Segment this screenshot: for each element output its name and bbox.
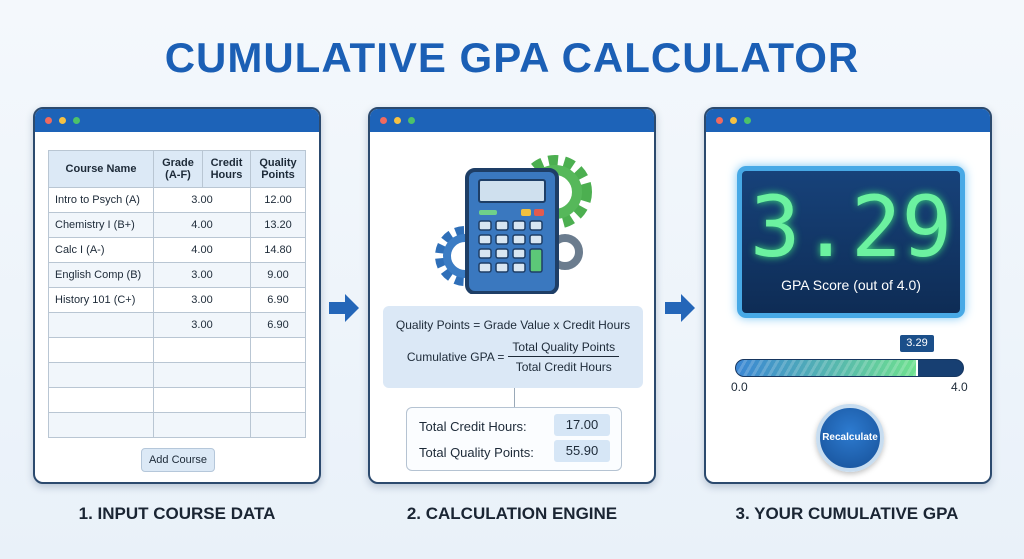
totals box: 55.90 (566, 443, 598, 458)
text: 2. CALCULATION ENGINE (407, 504, 617, 523)
formula box: Cumulative GPA = (407, 350, 504, 364)
panel: cumulative gpa: 4.0 (951, 380, 968, 394)
course table: 6.90 (267, 294, 289, 306)
course table: 14.80 (264, 244, 292, 256)
course table: 3.00 (191, 319, 213, 331)
gpa display: 3.29 (750, 178, 952, 276)
course table: Course Name (66, 163, 136, 175)
icon: calculator with gears (435, 155, 592, 294)
formula box: Quality Points = Grade Value x Credit Hours (396, 318, 630, 332)
tooltip: 3.29 (906, 337, 928, 349)
totals box: 17.00 (566, 417, 598, 432)
add course button (141, 448, 215, 472)
recalculate button (816, 404, 884, 472)
course table: 13.20 (264, 219, 292, 231)
course table: History 101 (C+) (55, 294, 135, 306)
course table: 4.00 (191, 244, 213, 256)
progress bar (735, 359, 964, 377)
panel: input course data (33, 107, 321, 484)
course table: Credit (211, 157, 242, 169)
add course button: Add Course (149, 454, 207, 466)
panel: cumulative gpa: 0.0 (731, 380, 748, 394)
course table: 4.00 (191, 219, 213, 231)
course table: Chemistry I (B+) (55, 219, 135, 231)
panel: cumulative gpa (704, 107, 992, 484)
course table: Quality (259, 157, 297, 169)
title: CUMULATIVE GPA CALCULATOR (165, 34, 859, 81)
text: 3. YOUR CUMULATIVE GPA (736, 504, 958, 523)
course table: 9.00 (267, 269, 289, 281)
course table: (A-F) (165, 169, 191, 181)
course table: Calc I (A-) (55, 244, 104, 256)
course table: 12.00 (264, 194, 292, 206)
totals box: Total Quality Points: (419, 445, 534, 460)
formula box: Total Credit Hours (516, 360, 612, 374)
totals box: Total Credit Hours: (419, 419, 527, 434)
course table: Intro to Psych (A) (55, 194, 140, 206)
recalculate button: Recalculate (822, 432, 878, 443)
gpa display (737, 166, 965, 318)
tooltip (900, 335, 934, 352)
arrow 2 (665, 294, 695, 322)
course table (48, 150, 306, 438)
formula box: Total Quality Points (512, 340, 615, 354)
course table: Grade (162, 157, 194, 169)
gpa display: GPA Score (out of 4.0) (781, 277, 921, 293)
course table: 3.00 (191, 194, 213, 206)
course table: 3.00 (191, 294, 213, 306)
course table: Hours (211, 169, 242, 181)
course table: 3.00 (191, 269, 213, 281)
course table: 6.90 (267, 319, 289, 331)
step labels: 1. INPUT COURSE DATA (79, 504, 275, 523)
arrow 1 (329, 294, 359, 322)
course table: Points (261, 169, 295, 181)
formula box (383, 306, 643, 388)
totals box (406, 407, 622, 471)
course table: English Comp (B) (55, 269, 141, 281)
panel: calculation engine (368, 107, 656, 484)
